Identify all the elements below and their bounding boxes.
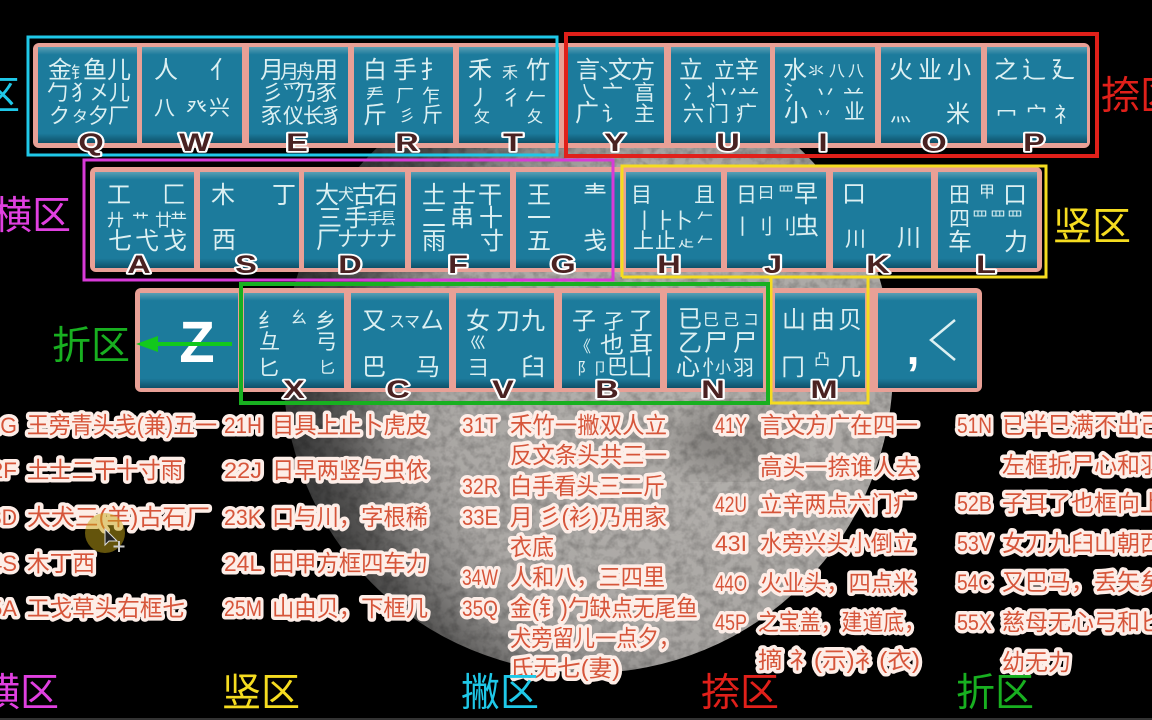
key X: 彑弓 bbox=[259, 331, 337, 354]
bottom zone labels: 竖区 bbox=[222, 672, 300, 715]
key E: 月用 bbox=[260, 57, 338, 84]
key B: 孑 bbox=[603, 311, 624, 334]
key V: 臼 bbox=[521, 354, 545, 381]
key B: 凵 bbox=[628, 354, 652, 381]
key letters: K bbox=[866, 251, 890, 279]
key row backgrounds bbox=[33, 43, 1090, 392]
key G bbox=[516, 172, 620, 268]
key letters: J bbox=[764, 251, 782, 279]
key L bbox=[938, 172, 1037, 268]
key U: 冫丬丷䒑 bbox=[683, 82, 759, 105]
key V: 彐 bbox=[468, 357, 489, 380]
key U: 六门疒 bbox=[683, 103, 757, 126]
rhyme list: shu zone: 山由贝，下框几 bbox=[272, 595, 428, 621]
key letters: S bbox=[235, 251, 257, 279]
key B: 巴 bbox=[607, 356, 628, 379]
rhyme list: na zone bbox=[715, 412, 925, 673]
key I: 水 bbox=[783, 57, 807, 84]
key B: 子了 bbox=[572, 308, 653, 335]
key J: 虫 bbox=[795, 213, 819, 240]
key G: 一 bbox=[527, 205, 551, 232]
key letters: P bbox=[1023, 129, 1045, 157]
key Z bbox=[140, 293, 238, 388]
side zone labels: 竖区 bbox=[1053, 206, 1131, 249]
keyboard row 2 bbox=[95, 172, 1037, 268]
bottom zone labels: 捺区 bbox=[701, 672, 779, 715]
rhyme list: shu zone bbox=[224, 412, 428, 621]
key letters: Q bbox=[78, 129, 104, 157]
key X bbox=[244, 293, 344, 388]
key E: 豕仪长豸 bbox=[261, 105, 342, 128]
key Q: 勹犭㐅儿 bbox=[47, 82, 130, 105]
rhyme list: na zone: 火业头，四点米 bbox=[760, 570, 915, 596]
rhyme list: pie zone: 月 彡(衫)乃用家 bbox=[510, 504, 667, 530]
key D: ナナナ bbox=[337, 228, 397, 251]
key J: 曰罒 bbox=[758, 185, 794, 202]
rhyme list: pie zone: 33E bbox=[462, 505, 498, 530]
rhyme list: zhe zone bbox=[957, 412, 1152, 675]
bottom zone labels bbox=[0, 672, 1034, 715]
key F: 土士干 bbox=[422, 182, 502, 209]
key X: 匕 bbox=[258, 357, 279, 380]
rhyme list: shu zone: 目具上止卜虎皮 bbox=[272, 412, 428, 438]
key E: 彡爫乃豕 bbox=[262, 82, 337, 105]
key I: 氺八八 bbox=[808, 63, 864, 80]
key T: 攵夂 bbox=[474, 108, 543, 126]
key N: 心 bbox=[676, 354, 700, 381]
key G: 五戋 bbox=[527, 228, 607, 255]
key T: 禾 bbox=[502, 64, 518, 82]
key N: 已 bbox=[678, 306, 702, 333]
key G: 王龶 bbox=[527, 182, 607, 209]
key J: 早 bbox=[794, 181, 818, 208]
key Q bbox=[38, 47, 137, 143]
key letters: V bbox=[492, 376, 515, 404]
key P bbox=[987, 47, 1087, 143]
key H: 丨⺊卜 bbox=[634, 210, 693, 233]
key M: 山由贝 bbox=[782, 307, 862, 334]
key Y bbox=[568, 47, 664, 143]
rhyme list: zhe zone: 55X bbox=[957, 610, 992, 635]
key C: 巴马 bbox=[362, 354, 440, 381]
key C: スマ bbox=[389, 314, 420, 331]
rhyme list: na zone: 言文方广在四一 bbox=[760, 412, 918, 438]
rhyme list: zhe zone: 52B bbox=[957, 491, 992, 516]
rhyme list: zhe zone: 幼无力 bbox=[1002, 649, 1071, 675]
key F bbox=[411, 172, 510, 268]
bottom zone labels: 折区 bbox=[956, 672, 1034, 715]
rhyme list: shu zone: 23K bbox=[224, 505, 262, 530]
key P: 之辶廴 bbox=[994, 57, 1075, 84]
key H: 龰𠂉 bbox=[678, 233, 713, 250]
rhyme list: na zone: 44O bbox=[715, 571, 747, 596]
key A: 廾艹廿龷 bbox=[107, 211, 187, 230]
key H bbox=[626, 172, 721, 268]
rhyme list: pie zone: 34W bbox=[462, 565, 498, 590]
key R: 龵厂乍 bbox=[366, 86, 440, 106]
rhyme list: heng zone bbox=[0, 412, 217, 621]
key D bbox=[304, 172, 405, 268]
rhyme list: heng zone: 王旁青头戋(兼)五一 bbox=[27, 412, 217, 438]
key Y: 广 bbox=[575, 100, 599, 127]
key R: 白手扌 bbox=[363, 57, 444, 84]
key B: 也耳 bbox=[600, 332, 653, 359]
rhyme list: heng zone: 木丁西 bbox=[27, 550, 95, 576]
key B: 阝卩 bbox=[577, 360, 608, 378]
key T: 丿彳𠂉 bbox=[469, 87, 546, 110]
key letters: H bbox=[657, 251, 681, 279]
rhyme list: shu zone: 口与川，字根稀 bbox=[272, 504, 428, 530]
key P: 冖宀礻 bbox=[996, 104, 1075, 127]
rhyme list: pie zone bbox=[462, 412, 698, 681]
rhyme list: na zone: 之宝盖，建道底， bbox=[758, 609, 925, 635]
key Y: 讠主 bbox=[602, 103, 655, 126]
rhyme list: na zone: 摘 礻(示)衤(衣) bbox=[758, 647, 920, 673]
key R bbox=[354, 47, 453, 143]
keyboard row 3 bbox=[140, 293, 977, 388]
key L: 车力 bbox=[948, 229, 1028, 256]
rhyme list: zhe zone: 54C bbox=[957, 570, 992, 595]
key D: 手镸 bbox=[367, 210, 396, 228]
rhyme list: na zone: 42U bbox=[715, 492, 747, 517]
rhyme list: heng zone: 大犬三(羊)古石厂 bbox=[27, 504, 210, 530]
key O: 火业小 bbox=[889, 57, 971, 84]
key E: 月舟 bbox=[280, 61, 315, 83]
key letters: F bbox=[448, 251, 468, 279]
key U bbox=[671, 47, 770, 143]
rhyme list: na zone: 高头一捺谁人去 bbox=[760, 454, 918, 480]
rhyme list: shu zone: 日早两竖与虫依 bbox=[272, 457, 428, 483]
key E bbox=[249, 47, 348, 143]
key X: 幺 bbox=[291, 309, 307, 327]
rhyme list: pie zone: 31T bbox=[462, 413, 498, 438]
key H: 上止 bbox=[633, 230, 676, 253]
key O: 米 bbox=[946, 101, 970, 128]
key S: 木丁 bbox=[211, 182, 296, 209]
zone frames bbox=[28, 34, 1097, 403]
key Q: ク夕厂 bbox=[49, 105, 129, 128]
key D: 厂 bbox=[316, 227, 340, 254]
key U: 立辛 bbox=[679, 57, 759, 84]
rhyme list: shu zone: 22J bbox=[224, 458, 262, 483]
key I: 氵丷䒑 bbox=[784, 82, 864, 105]
key Y: 言文方 bbox=[576, 57, 655, 84]
key J: 丨刂刂 bbox=[732, 216, 797, 239]
key letters: R bbox=[395, 129, 419, 157]
rhyme list: pie zone: 人和八，三四里 bbox=[510, 564, 665, 590]
key M bbox=[775, 293, 865, 388]
key letters: D bbox=[338, 251, 362, 279]
key N bbox=[667, 293, 763, 388]
key letters: I bbox=[818, 129, 828, 157]
bottom zone labels: 撇区 bbox=[461, 672, 539, 715]
key J: 日 bbox=[736, 184, 757, 207]
rhyme list: na zone: 43I bbox=[715, 531, 747, 556]
key D: 犬 bbox=[338, 186, 354, 204]
key letters: E bbox=[286, 129, 308, 157]
key L: 田 bbox=[949, 184, 970, 207]
key O bbox=[881, 47, 981, 143]
rhyme list: na zone: 水旁兴头小倒立 bbox=[760, 530, 915, 556]
key I: 小 bbox=[784, 100, 808, 127]
rhyme list: pie zone: 金(钅)勹缺点无尾鱼 bbox=[510, 595, 698, 621]
rhyme list: zhe zone: 51N bbox=[957, 413, 992, 438]
key K bbox=[833, 172, 931, 268]
key U: 立 bbox=[714, 60, 735, 83]
key letters: X bbox=[283, 376, 306, 404]
key Y: 丶 bbox=[596, 63, 612, 80]
key comma: , bbox=[907, 322, 919, 374]
rhyme list: na zone: 45P bbox=[715, 610, 747, 635]
mouse cursor highlight bbox=[85, 513, 125, 553]
side zone labels: 折区 bbox=[52, 325, 130, 368]
key X: 匕 bbox=[319, 359, 335, 377]
key letters: A bbox=[127, 251, 151, 279]
key letters: C bbox=[386, 376, 410, 404]
rhyme list: pie zone: 禾竹一撇双人立 bbox=[510, 412, 667, 438]
key V: 女刀九 bbox=[466, 308, 545, 335]
key N: 忄羽 bbox=[702, 357, 754, 380]
key C: 又厶 bbox=[362, 308, 444, 335]
key M: 冂几 bbox=[781, 354, 861, 381]
key I: 业 bbox=[844, 101, 865, 124]
key M: 凸 bbox=[814, 352, 830, 369]
rhyme list: pie zone: 衣底 bbox=[510, 534, 554, 560]
key W: 八癶兴 bbox=[154, 97, 230, 120]
key K: 川 bbox=[845, 228, 866, 251]
key F: 雨寸 bbox=[422, 228, 504, 255]
key I bbox=[775, 47, 875, 143]
key letters: M bbox=[810, 376, 838, 404]
key R: 斤 bbox=[422, 104, 443, 127]
key N: 巳己コ bbox=[703, 312, 759, 329]
rhyme list: pie zone: 反文条头共三一 bbox=[510, 442, 667, 468]
key N: 乙尸尸 bbox=[678, 330, 757, 357]
key I: 丷 bbox=[816, 106, 832, 123]
key V bbox=[456, 293, 554, 388]
key L: 四 bbox=[949, 208, 970, 231]
key Q: 金鱼儿 bbox=[48, 57, 131, 84]
key S bbox=[200, 172, 299, 268]
key letters: N bbox=[701, 376, 725, 404]
key W bbox=[142, 47, 242, 143]
arrow: zhe zone bbox=[136, 336, 232, 352]
key letters: L bbox=[976, 251, 996, 279]
key W: 人亻 bbox=[154, 57, 234, 84]
rhyme list: shu zone: 田甲方框四车力 bbox=[272, 550, 428, 576]
side zone labels bbox=[0, 75, 1152, 368]
key H: 目且 bbox=[631, 184, 715, 207]
key D: 大古石 bbox=[315, 182, 398, 209]
key letters: U bbox=[716, 129, 740, 157]
rhyme list: shu zone: 24L bbox=[224, 551, 262, 576]
rhyme list: pie zone: 32R bbox=[462, 474, 498, 499]
key letters bbox=[78, 129, 1045, 404]
key O: 灬 bbox=[890, 103, 911, 126]
key letters: W bbox=[179, 129, 211, 157]
key C bbox=[351, 293, 449, 388]
key T bbox=[459, 47, 559, 143]
key letters: T bbox=[503, 129, 523, 157]
key V: 巛 bbox=[470, 335, 486, 352]
key B bbox=[562, 293, 660, 388]
key L: 罒罒罒 bbox=[972, 210, 1023, 227]
rhyme list: na zone: 41Y bbox=[715, 413, 747, 438]
key letters: O bbox=[921, 129, 947, 157]
key R: 斤 bbox=[363, 102, 387, 129]
keyboard row 1 bbox=[38, 47, 1087, 143]
key J bbox=[727, 172, 826, 268]
rhyme list: heng zone: 工戈草头右框七 bbox=[27, 595, 185, 621]
key S: 西 bbox=[212, 227, 236, 254]
key T: 禾竹 bbox=[468, 57, 550, 84]
key A: 七弋戈 bbox=[108, 228, 187, 255]
key A bbox=[95, 172, 194, 268]
rhyme list: pie zone: 白手看头三二斤 bbox=[510, 473, 665, 499]
key L: 甲 bbox=[979, 184, 995, 201]
key A: 工匚 bbox=[107, 182, 186, 209]
rhyme list: pie zone: 35Q bbox=[462, 596, 498, 621]
key R: 彡 bbox=[399, 108, 415, 125]
key comma bbox=[878, 293, 977, 388]
key X: 纟乡 bbox=[258, 310, 336, 333]
rhyme list: zhe zone: 53V bbox=[957, 531, 992, 556]
rhyme list: heng zone: 土士二干十寸雨 bbox=[27, 457, 183, 483]
key Y: ㇏亠亯 bbox=[578, 82, 655, 105]
background moon bbox=[284, 148, 892, 672]
key K: 川 bbox=[897, 225, 921, 252]
key H: 𠂉 bbox=[697, 209, 713, 226]
key Q: タ bbox=[72, 108, 88, 126]
key L: 口 bbox=[1003, 182, 1027, 209]
rhyme list: na zone: 立辛两点六门疒 bbox=[760, 491, 915, 517]
key K: 口 bbox=[842, 181, 866, 208]
rhyme list: pie zone: 氏无七(妻) bbox=[510, 655, 620, 681]
rhyme list: shu zone: 21H bbox=[224, 413, 262, 438]
key letters: G bbox=[550, 251, 576, 279]
key B: 《 bbox=[575, 339, 591, 356]
key D: 三手 bbox=[318, 205, 368, 232]
key Q: 钅 bbox=[71, 64, 87, 82]
rhyme list: pie zone: 犬旁留儿一点夕， bbox=[510, 625, 680, 651]
rhyme list: shu zone: 25M bbox=[224, 596, 262, 621]
key N: 小 bbox=[715, 359, 731, 377]
key Z: Z bbox=[179, 310, 215, 375]
key letters: B bbox=[595, 376, 619, 404]
key F: 二串十 bbox=[422, 205, 503, 232]
key letters: Y bbox=[604, 129, 626, 157]
